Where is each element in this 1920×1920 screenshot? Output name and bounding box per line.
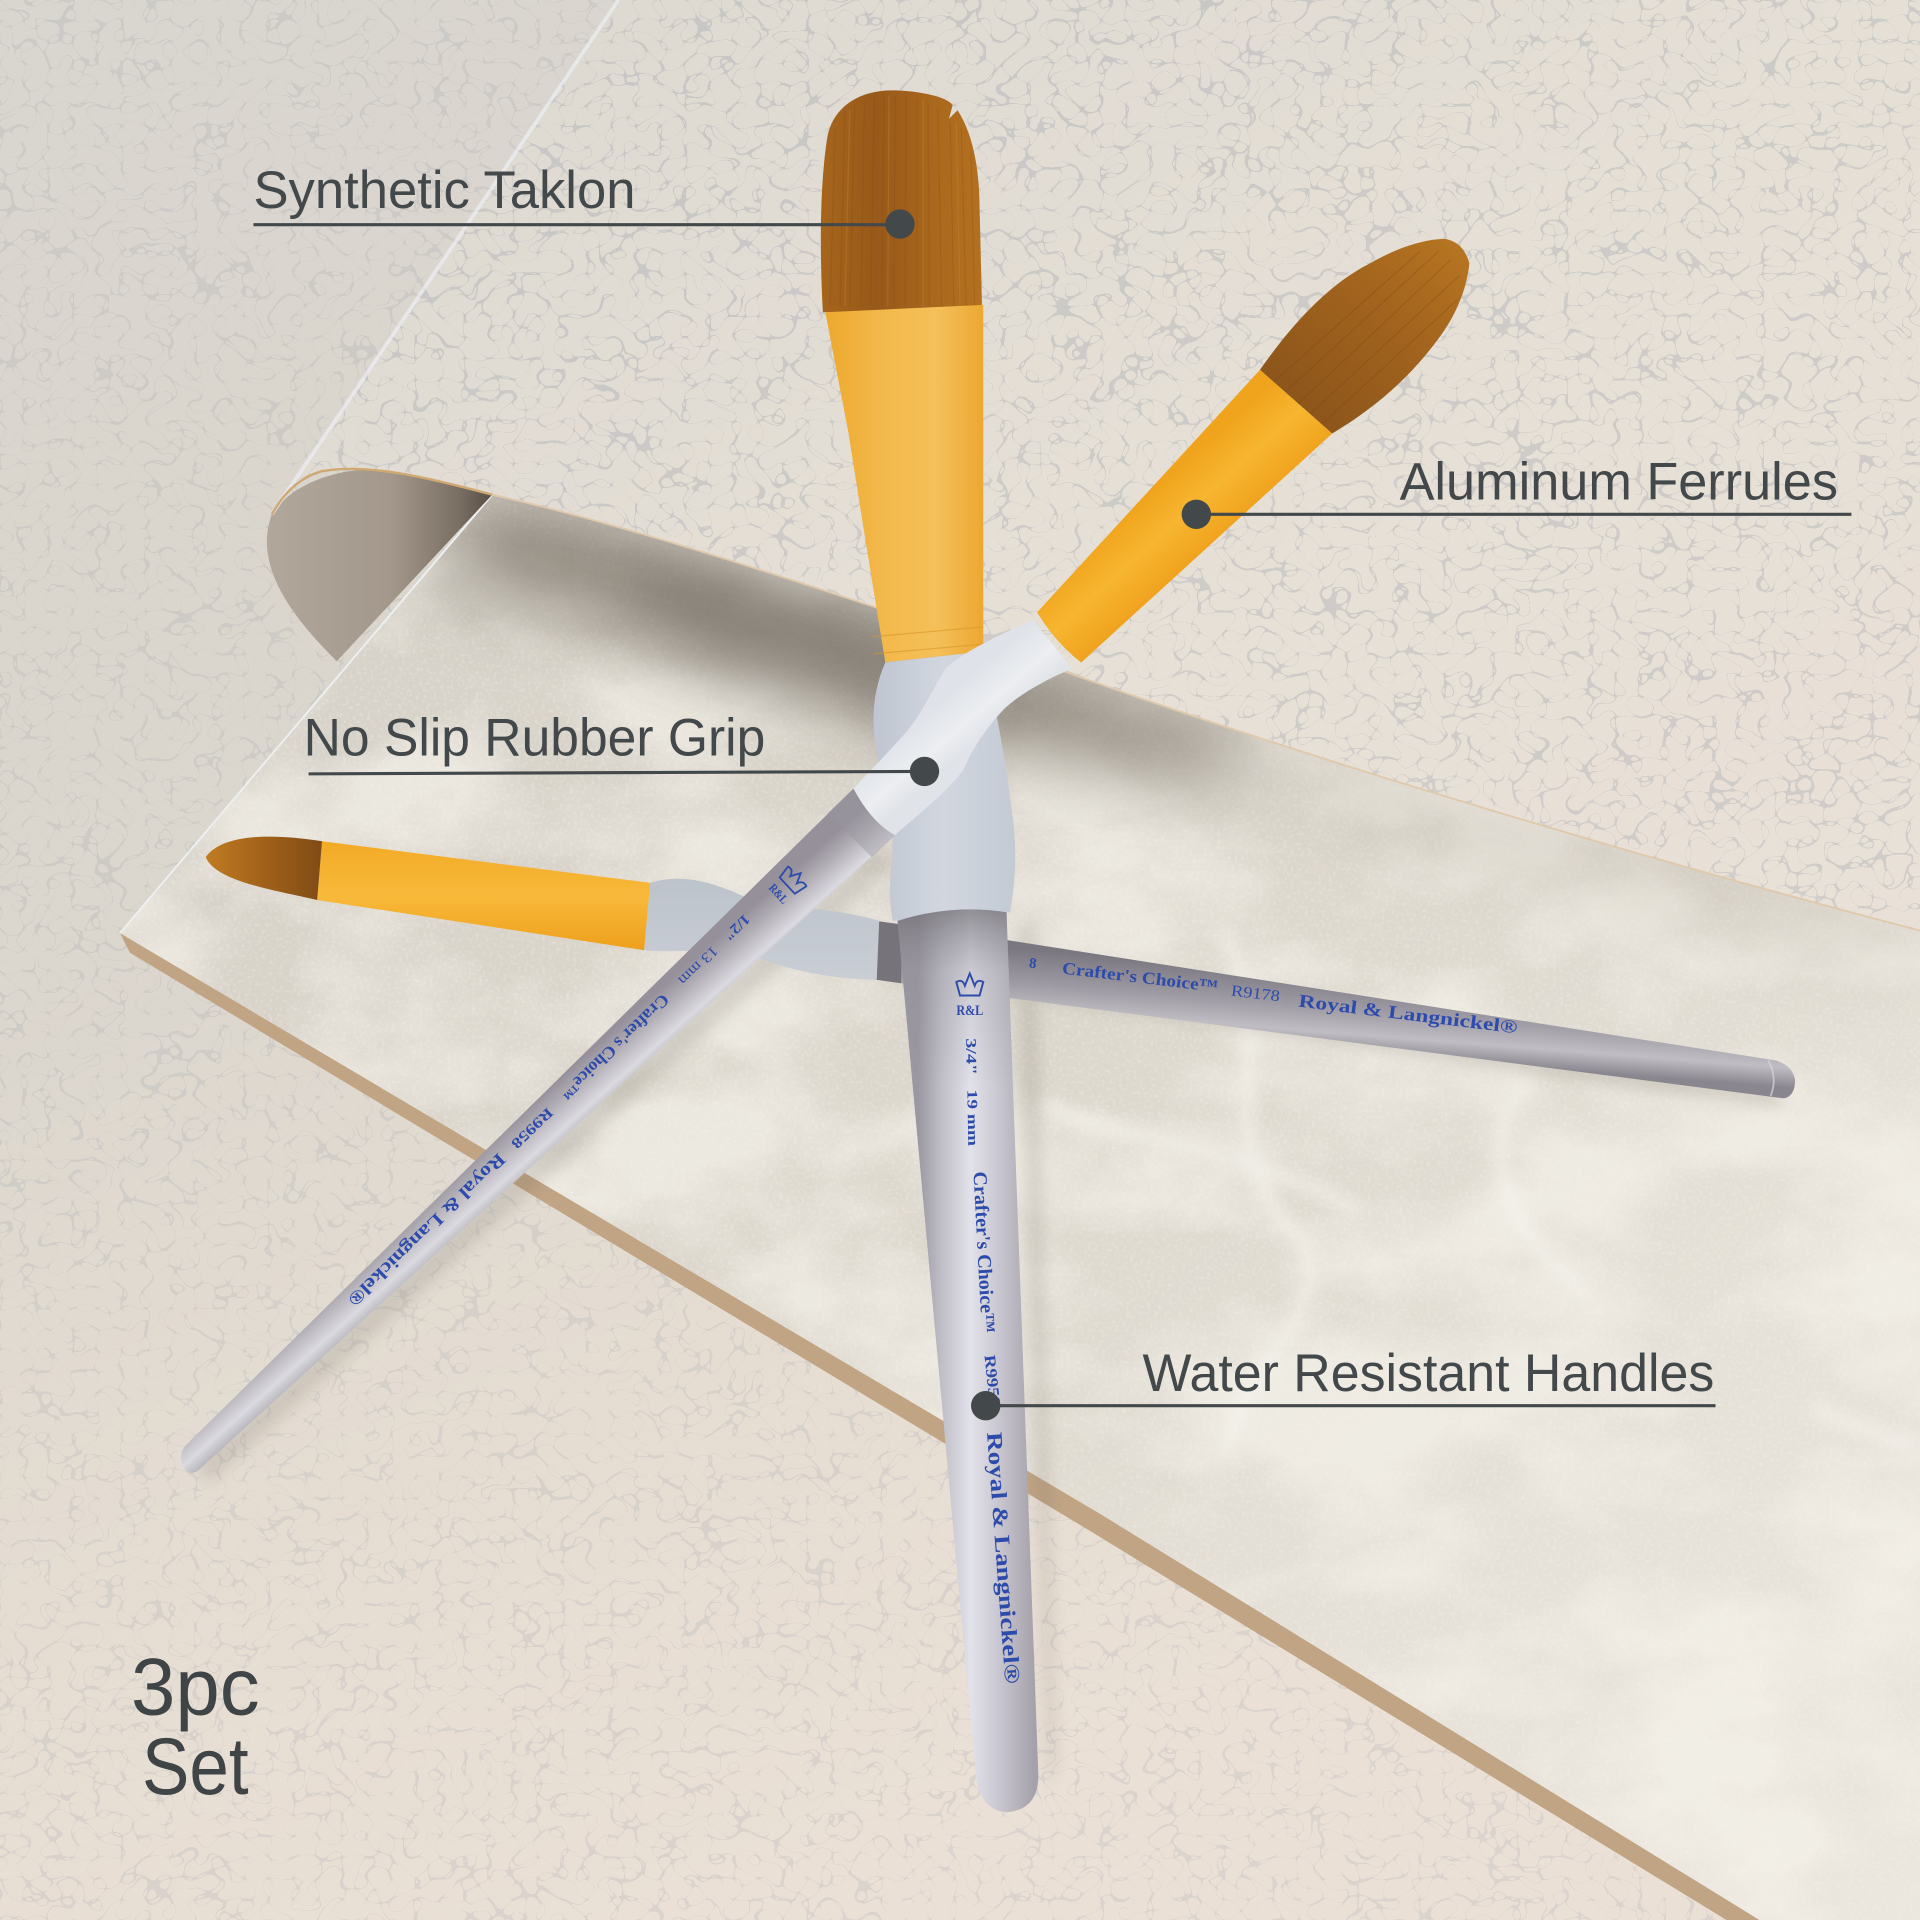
- callout: Aluminum Ferrules: Aluminum Ferrules: [1400, 453, 1838, 512]
- brush 3 imprint: R9178: [1230, 983, 1281, 1005]
- brush 1 imprint: 19 mm: [963, 1090, 980, 1146]
- brush 2 imprint: 1/2": [720, 911, 753, 943]
- brush 2 imprint: Royal & Langnickel®: [344, 1149, 509, 1310]
- marble tile with tan edge: [120, 496, 1920, 1920]
- set size label: Set: [142, 1722, 249, 1812]
- brush 1 ferrule: [825, 305, 983, 662]
- brush 1 handle: [898, 909, 1038, 1812]
- brush 1 imprint: 3/4": [962, 1038, 979, 1075]
- brush 1 logo: crown and R&L: [956, 973, 983, 1019]
- brush 2 imprint: [344, 911, 753, 1310]
- brush 3 imprint: Royal & Langnickel®: [1297, 991, 1519, 1037]
- brush 2 ferrule: [1037, 370, 1332, 662]
- callout: Synthetic Taklon: [253, 161, 915, 239]
- soft brush shadows: [196, 845, 1782, 1788]
- brush 3 bristles: [206, 837, 322, 900]
- brush 3: small filbert, lower horizontal: [206, 837, 1795, 1098]
- brush 1 bristles: [821, 90, 982, 312]
- brush 1 imprint: [962, 1038, 1025, 1685]
- brush 3 ferrule: [317, 841, 650, 950]
- brush 1 imprint: Crafter's Choice™: [968, 1171, 998, 1334]
- callout: Synthetic Taklon: Synthetic Taklon: [253, 161, 636, 220]
- brush 3 grip: [644, 879, 879, 980]
- brush 3 imprint: 8: [1028, 955, 1037, 972]
- brush 1 logo: crown and R&L: R&L: [956, 1003, 983, 1019]
- callout: No Slip Rubber Grip: [304, 709, 939, 786]
- brush 2: angled, upper right to lower left: [181, 239, 1469, 1473]
- brush 2 logo: [764, 863, 810, 908]
- brush 1 grip: [874, 651, 1015, 921]
- brush 1 imprint: Royal & Langnickel®: [982, 1431, 1025, 1685]
- set size label: [131, 1642, 260, 1812]
- brush 1 imprint: R9958: [981, 1354, 1003, 1407]
- brush 2 handle: [181, 789, 895, 1473]
- brush 3 imprint: [1028, 955, 1519, 1037]
- callout: No Slip Rubber Grip: No Slip Rubber Grip: [304, 709, 765, 768]
- brush 2 imprint: 13 mm: [674, 942, 721, 988]
- set size label: 3pc: [131, 1642, 260, 1732]
- brush 3 imprint: Crafter's Choice™: [1061, 959, 1219, 996]
- brush 2 imprint: Crafter's Choice™: [557, 990, 673, 1103]
- callout: Aluminum Ferrules: [1182, 453, 1851, 529]
- brush 2 logo: R&L: [766, 881, 791, 907]
- brush 3 handle: [876, 921, 1795, 1098]
- callout: Water Resistant Handles: [971, 1344, 1716, 1420]
- paper sheet curling over tile: [266, 0, 1920, 932]
- brush 2 imprint: R9958: [508, 1104, 556, 1151]
- brush 2 grip: [853, 620, 1071, 835]
- brush 2 bristles: [1260, 239, 1469, 433]
- brush 1: large flat, vertical: [821, 90, 1038, 1812]
- callout: Water Resistant Handles: Water Resistant Handles: [1142, 1344, 1714, 1403]
